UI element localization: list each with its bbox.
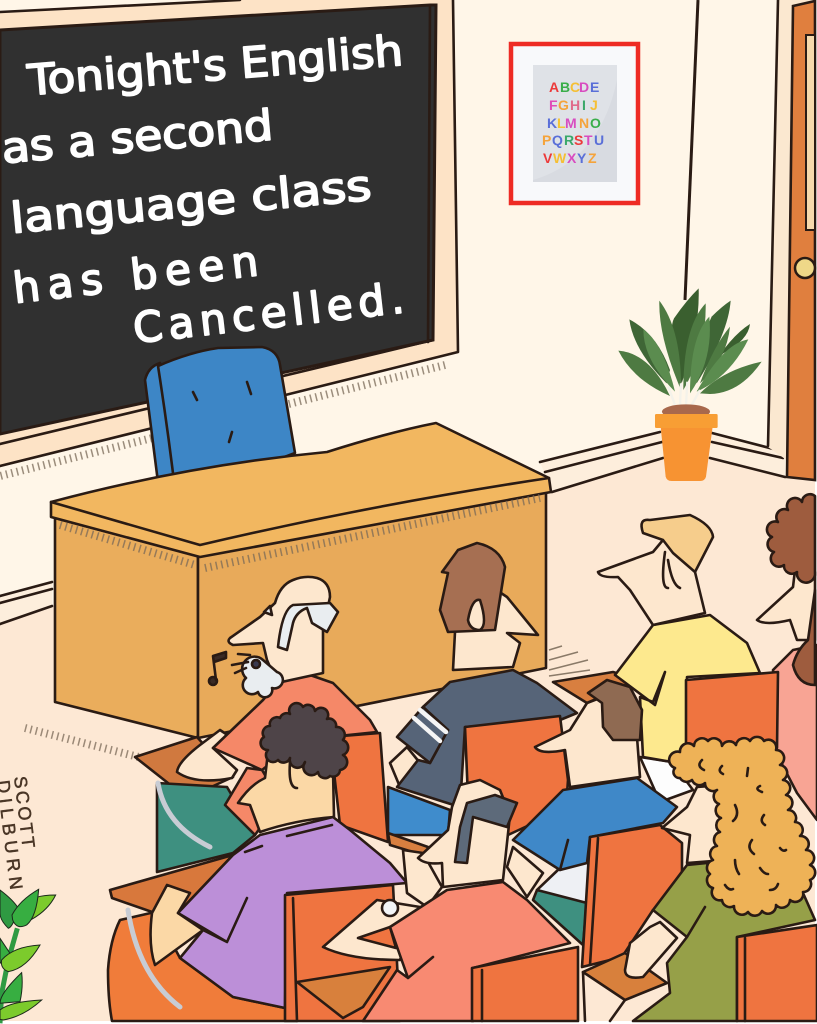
alphabet poster: X xyxy=(567,150,577,166)
chalk message: Tonight's English xyxy=(25,26,405,105)
alphabet poster: L xyxy=(557,115,566,131)
alphabet poster: E xyxy=(590,79,599,95)
student: dark curly hair man in purple xyxy=(108,703,407,1021)
potted plant xyxy=(618,288,762,481)
music note xyxy=(209,652,226,685)
blue chair xyxy=(145,347,295,498)
center chair and desk xyxy=(582,825,682,1021)
alphabet poster: M xyxy=(565,115,577,131)
student: right edge with curly hair xyxy=(686,494,817,820)
alphabet poster: Z xyxy=(588,150,597,166)
student: old man humming xyxy=(135,577,377,872)
alphabet poster: U xyxy=(594,132,604,148)
alphabet poster: D xyxy=(579,79,589,95)
alphabet poster: I xyxy=(582,97,586,113)
alphabet poster: F xyxy=(549,97,558,113)
alphabet poster: O xyxy=(590,115,601,131)
alphabet poster: R xyxy=(564,132,574,148)
student: brown hair man xyxy=(388,543,577,835)
chalk message: language class xyxy=(8,161,373,243)
alphabet poster: S xyxy=(574,132,583,148)
alphabet poster: Y xyxy=(577,150,587,166)
alphabet poster: J xyxy=(590,97,598,113)
alphabet poster: A xyxy=(549,79,559,95)
chalk message: as a second xyxy=(0,100,275,173)
alphabet poster: K xyxy=(547,115,557,131)
door xyxy=(768,0,815,480)
signature xyxy=(0,775,39,891)
alphabet poster: C xyxy=(570,79,580,95)
alphabet poster: T xyxy=(584,132,593,148)
alphabet poster: V xyxy=(543,150,553,166)
student: man in blue xyxy=(513,680,677,945)
baseboards xyxy=(0,432,785,624)
teacher desk xyxy=(51,423,551,738)
chalkboard xyxy=(0,0,459,476)
student: man with head on desk xyxy=(297,780,578,1021)
floor shadow strokes xyxy=(25,646,590,765)
corner leaves xyxy=(0,889,56,1023)
alphabet poster: P xyxy=(542,132,551,148)
chalk message xyxy=(0,26,406,353)
door knob xyxy=(795,258,815,278)
student chairs, back row xyxy=(330,716,568,856)
signature: SCOTT xyxy=(10,775,39,849)
student: curly blonde woman xyxy=(625,737,817,1021)
alphabet poster: Q xyxy=(552,132,563,148)
alphabet poster: W xyxy=(553,150,567,166)
alphabet poster: B xyxy=(560,79,570,95)
chalk message: has been xyxy=(11,236,261,313)
alphabet poster xyxy=(511,44,638,203)
chalk message: Cancelled. xyxy=(131,273,406,353)
alphabet poster: G xyxy=(558,97,569,113)
student: blond man xyxy=(553,515,760,802)
alphabet poster: H xyxy=(570,97,580,113)
alphabet poster: N xyxy=(579,115,589,131)
